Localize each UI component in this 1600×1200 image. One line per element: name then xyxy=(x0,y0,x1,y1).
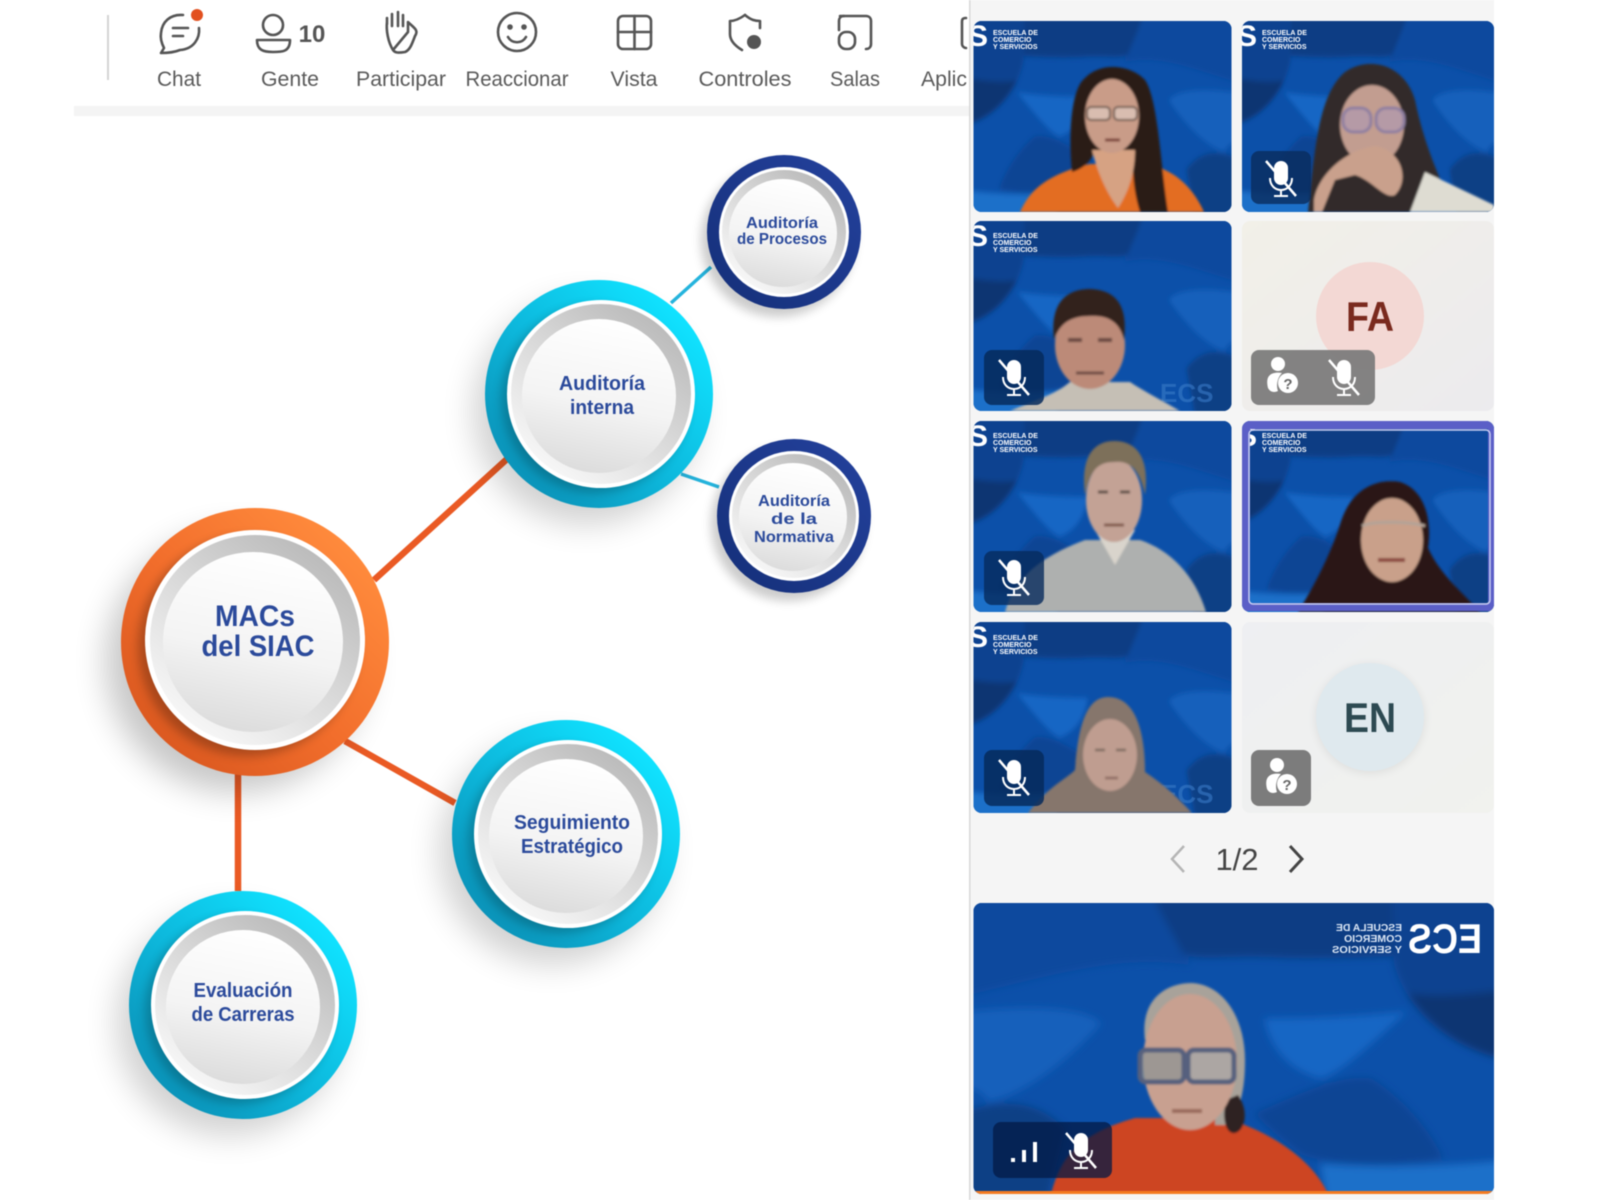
mute chip xyxy=(1251,151,1311,204)
node: Seguimiento Estratégico: Seguimiento xyxy=(514,812,630,834)
video tile: active speaker: S xyxy=(1237,420,1257,453)
video tile: man in checked shirt: ESCUELA DE xyxy=(993,233,1038,240)
status chip xyxy=(1251,350,1375,405)
avatar FA: FA xyxy=(1346,293,1394,340)
icon: people with count xyxy=(257,15,325,52)
icon: apps partial xyxy=(962,18,966,48)
mute chip xyxy=(984,350,1044,405)
video tile: woman with hand on face xyxy=(1241,20,1495,213)
video tile: man in checked shirt: COMERCIO xyxy=(993,240,1032,247)
node: Auditoría interna: Auditoría xyxy=(559,373,646,395)
video tile: woman with orange blouse: ESCUELA DE xyxy=(993,30,1038,37)
status chip xyxy=(1251,750,1311,806)
pagination xyxy=(1172,842,1302,877)
toolbar xyxy=(74,9,969,116)
video tile: woman with orange blouse: S xyxy=(968,20,988,53)
icon: people with count: 10 xyxy=(299,21,325,48)
label: Controles: Controles xyxy=(698,68,792,91)
node: Auditoría interna: interna xyxy=(570,397,635,419)
video tile: active speaker: ESCUELA DE xyxy=(1262,433,1307,440)
mirrored logo: ECS xyxy=(1408,915,1482,962)
mirrored logo: COMERCIO xyxy=(1344,934,1402,945)
node: MACs del SIAC xyxy=(106,508,389,792)
video tile: man in grey shirt: ESCUELA DE xyxy=(993,433,1038,440)
video tile: woman with hand on face: ESCUELA DE xyxy=(1262,30,1307,37)
watermark: ECS xyxy=(1160,378,1213,408)
mirrored logo xyxy=(1332,923,1480,954)
node: Auditoría de la Normativa xyxy=(711,439,871,601)
video tile: woman with hand on face: Y SERVICIOS xyxy=(1262,44,1307,51)
video tile: man in grey shirt xyxy=(972,420,1232,613)
video tile: active speaker: COMERCIO xyxy=(1262,440,1301,447)
avatar EN xyxy=(1316,663,1424,773)
video tile: woman with long hair xyxy=(972,621,1232,814)
video tile: avatar FA xyxy=(1242,221,1494,411)
pagination: 1/2 xyxy=(1215,842,1259,877)
icon: rooms xyxy=(839,16,871,49)
node: Seguimiento Estratégico: Estratégico xyxy=(521,836,623,858)
video tile: man in grey shirt: Y SERVICIOS xyxy=(993,447,1038,454)
node: Auditoría de la Normativa: Auditoría xyxy=(758,493,830,510)
avatar EN: EN xyxy=(1344,694,1396,741)
node: Auditoría de la Normativa: de la xyxy=(771,511,817,528)
avatar FA xyxy=(1316,262,1424,370)
video tile: man in grey shirt: COMERCIO xyxy=(993,440,1032,447)
video tile: avatar EN xyxy=(1250,660,1428,807)
video tile: woman with orange blouse: COMERCIO xyxy=(993,37,1032,44)
node: Auditoría de Procesos: Auditoría xyxy=(746,215,818,232)
icon: chat xyxy=(161,9,203,53)
video tile: woman with hand on face: COMERCIO xyxy=(1262,37,1301,44)
video tile: woman with orange blouse: Y SERVICIOS xyxy=(993,44,1038,51)
node: Evaluación de Carreras: de Carreras xyxy=(192,1004,294,1026)
label: Vista: Vista xyxy=(610,68,658,91)
mute chip xyxy=(984,750,1044,806)
node: Seguimiento Estratégico xyxy=(440,720,680,964)
video tile: woman with long hair: ESCUELA DE xyxy=(993,635,1038,642)
video tile: woman with long hair: Y SERVICIOS xyxy=(993,649,1038,656)
panel: video sidebar xyxy=(953,0,1524,1200)
node: Evaluación de Carreras: Evaluación xyxy=(194,980,292,1002)
video tile: man in checked shirt: S xyxy=(968,220,988,253)
node: Evaluación de Carreras xyxy=(117,891,357,1135)
node: Auditoría interna xyxy=(474,280,713,524)
icon: view grid xyxy=(618,16,651,49)
watermark: ECS xyxy=(1160,779,1213,809)
video tile: woman with long hair: COMERCIO xyxy=(993,642,1032,649)
label: Aplic: Aplic xyxy=(921,68,967,91)
icon: raised hand xyxy=(387,12,416,53)
node: Auditoría de la Normativa: Normativa xyxy=(754,529,834,546)
node: Auditoría de Procesos xyxy=(701,155,861,317)
label: Participar: Participar xyxy=(356,68,446,91)
video tile: woman with hand on face: S xyxy=(1237,20,1257,53)
label: Reaccionar: Reaccionar xyxy=(466,68,568,91)
video tile: man in checked shirt xyxy=(972,220,1232,412)
video tile: active speaker xyxy=(1241,420,1495,613)
video tile: woman with orange blouse xyxy=(972,20,1232,213)
video tile: woman with long hair: S xyxy=(968,621,988,654)
node: MACs del SIAC: MACs xyxy=(215,600,295,633)
connector lines xyxy=(238,267,719,891)
video tile: active speaker: Y SERVICIOS xyxy=(1262,447,1307,454)
mirrored logo: Y SERVICIOS xyxy=(1332,945,1402,956)
label: Salas: Salas xyxy=(830,68,880,91)
label: Gente: Gente xyxy=(261,68,319,91)
video tile: man in grey shirt: S xyxy=(968,420,988,453)
node: MACs del SIAC: del SIAC xyxy=(202,630,314,663)
label: Chat: Chat xyxy=(157,68,201,91)
mirrored logo: ESCUELA DE xyxy=(1336,923,1402,934)
video tile: presenter with red shirt xyxy=(972,902,1495,1195)
mute chip xyxy=(984,551,1044,605)
status chip xyxy=(993,1122,1112,1178)
icon: shield xyxy=(730,15,761,50)
icon: smile xyxy=(498,13,536,51)
video tile: man in checked shirt: Y SERVICIOS xyxy=(993,247,1038,254)
node: Auditoría de Procesos: de Procesos xyxy=(737,231,827,248)
